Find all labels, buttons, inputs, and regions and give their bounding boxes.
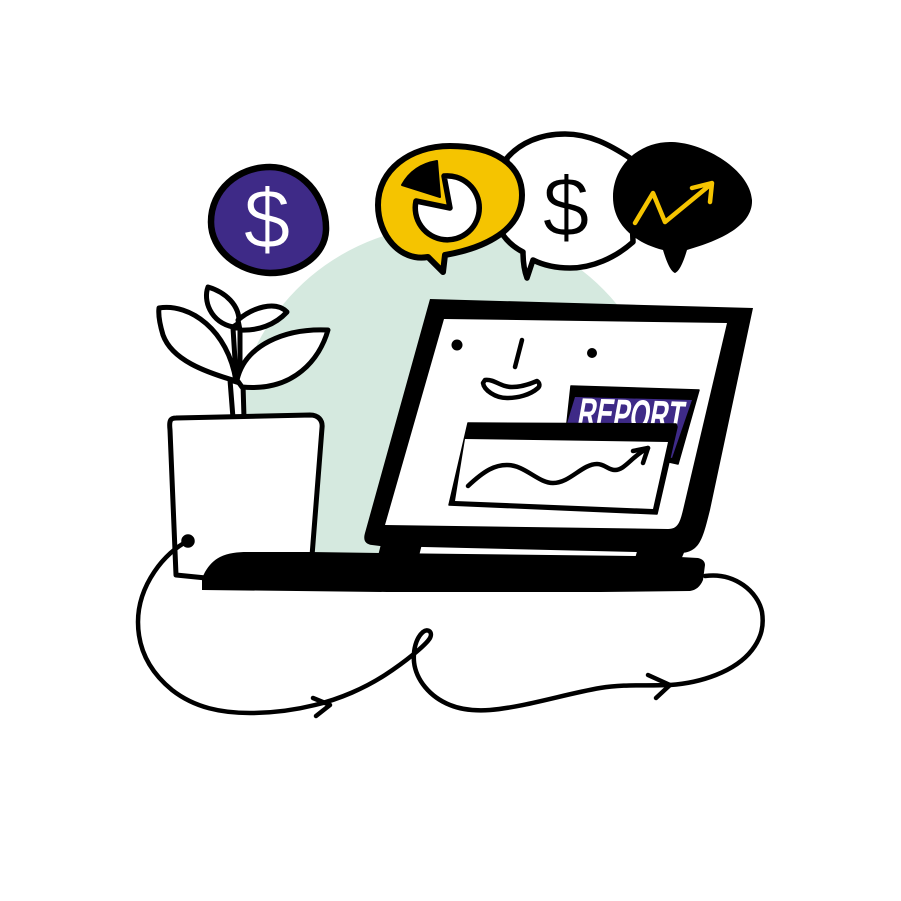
pie slice (402, 161, 440, 197)
plant pot (170, 415, 322, 578)
pie body (415, 176, 479, 240)
background green circle (234, 226, 666, 553)
laptop (202, 299, 753, 592)
icon: plant (159, 287, 328, 418)
laptop screen frame (364, 299, 753, 553)
lower stem (230, 380, 244, 418)
speech bubble: white dollar: $ (543, 160, 589, 254)
face (452, 340, 597, 398)
laptop hinges (377, 544, 686, 562)
laptop screen (385, 319, 727, 529)
looping arrow line (138, 536, 763, 716)
chart window (449, 423, 677, 514)
left leaf (159, 307, 236, 381)
laptop hinges gap (418, 544, 640, 558)
top small leaf (206, 287, 239, 327)
right small leaf (238, 306, 287, 330)
speech bubble: yellow pie chart (378, 146, 522, 272)
report card (565, 386, 699, 464)
icon: purple dollar coin: $ (244, 172, 290, 266)
right leaf (237, 330, 328, 387)
speech bubble: white dollar (503, 134, 633, 278)
report card: REPORT (574, 389, 689, 440)
laptop base (202, 552, 705, 592)
speech bubble: black growth arrow (613, 142, 752, 273)
upper stem (233, 328, 240, 376)
icon: purple dollar coin (211, 167, 326, 273)
